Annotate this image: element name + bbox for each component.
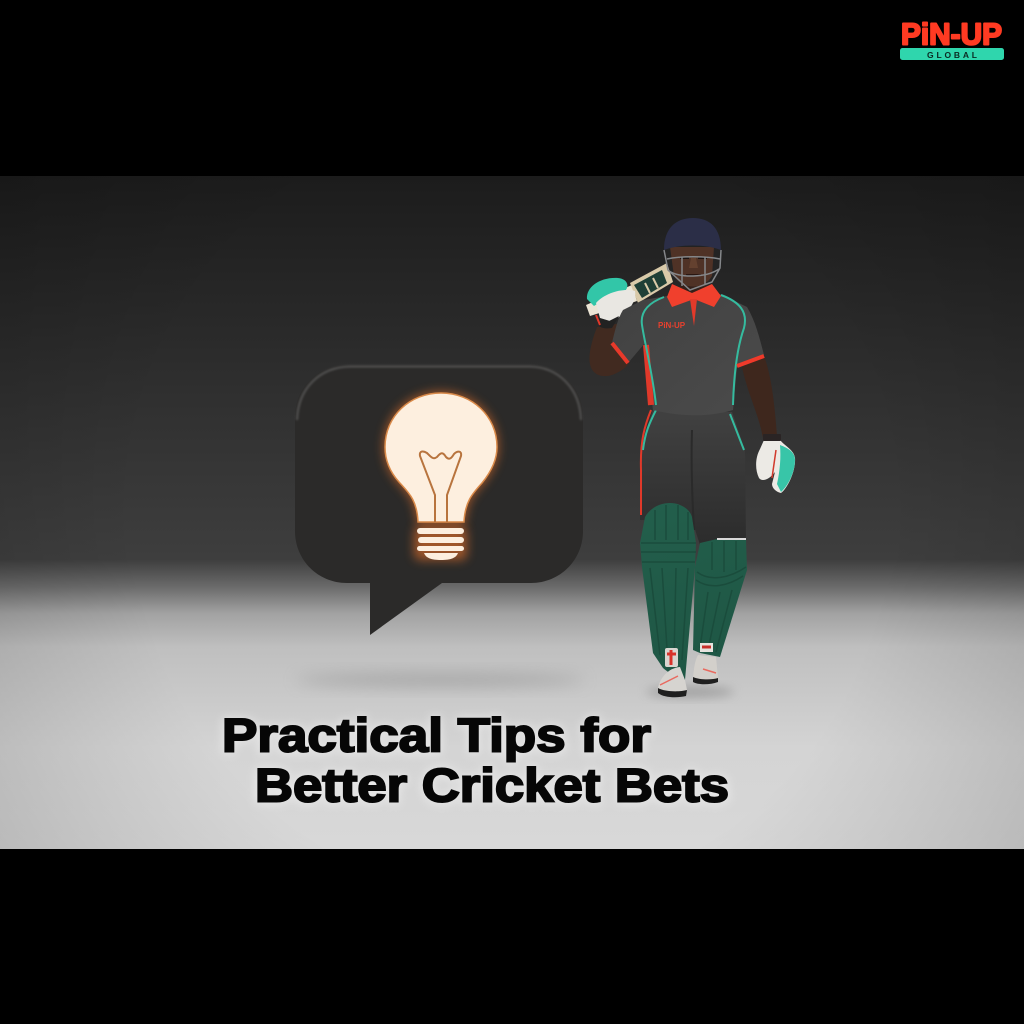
left batting pad — [640, 503, 696, 680]
title: Practical Tips for — [221, 709, 652, 762]
trouser piping — [641, 410, 744, 515]
left shoe — [658, 667, 687, 697]
title — [221, 708, 730, 812]
pad badges — [665, 643, 713, 667]
right batting pad — [693, 539, 747, 657]
lower glove — [756, 434, 795, 493]
logo sub-label: GLOBAL — [927, 50, 977, 60]
bubble rim highlight — [297, 366, 581, 420]
floor shadow under player — [646, 686, 734, 698]
trousers — [640, 410, 746, 545]
title: Better Cricket Bets — [255, 758, 729, 812]
right shoe — [693, 655, 718, 684]
raised arm — [589, 323, 630, 376]
neck — [680, 278, 706, 298]
jersey chest logo: PiN-UP — [658, 321, 686, 330]
bubble body — [295, 365, 583, 635]
lowering arm — [742, 356, 777, 438]
title: Practical Tips for — [222, 708, 651, 762]
title: Better Cricket Bets — [254, 759, 730, 812]
studio backdrop panel — [0, 176, 1024, 849]
speech bubble with light bulb — [295, 365, 583, 635]
logo teal bar — [900, 48, 1004, 60]
red collar — [667, 284, 721, 307]
logo wordmark: PiN-UP — [901, 16, 1002, 52]
batting glove on bat — [587, 278, 635, 328]
jersey red and teal piping — [612, 295, 764, 405]
floor shadow under speech bubble — [295, 674, 585, 686]
helmet — [664, 218, 721, 250]
gap between legs — [692, 430, 694, 530]
helmet grille — [664, 250, 721, 290]
icon: glowing light bulb — [385, 393, 497, 560]
jersey — [612, 294, 764, 415]
cricket player — [586, 218, 795, 698]
head — [670, 247, 714, 286]
cricket bat — [586, 263, 673, 316]
brand logo — [900, 16, 1004, 60]
